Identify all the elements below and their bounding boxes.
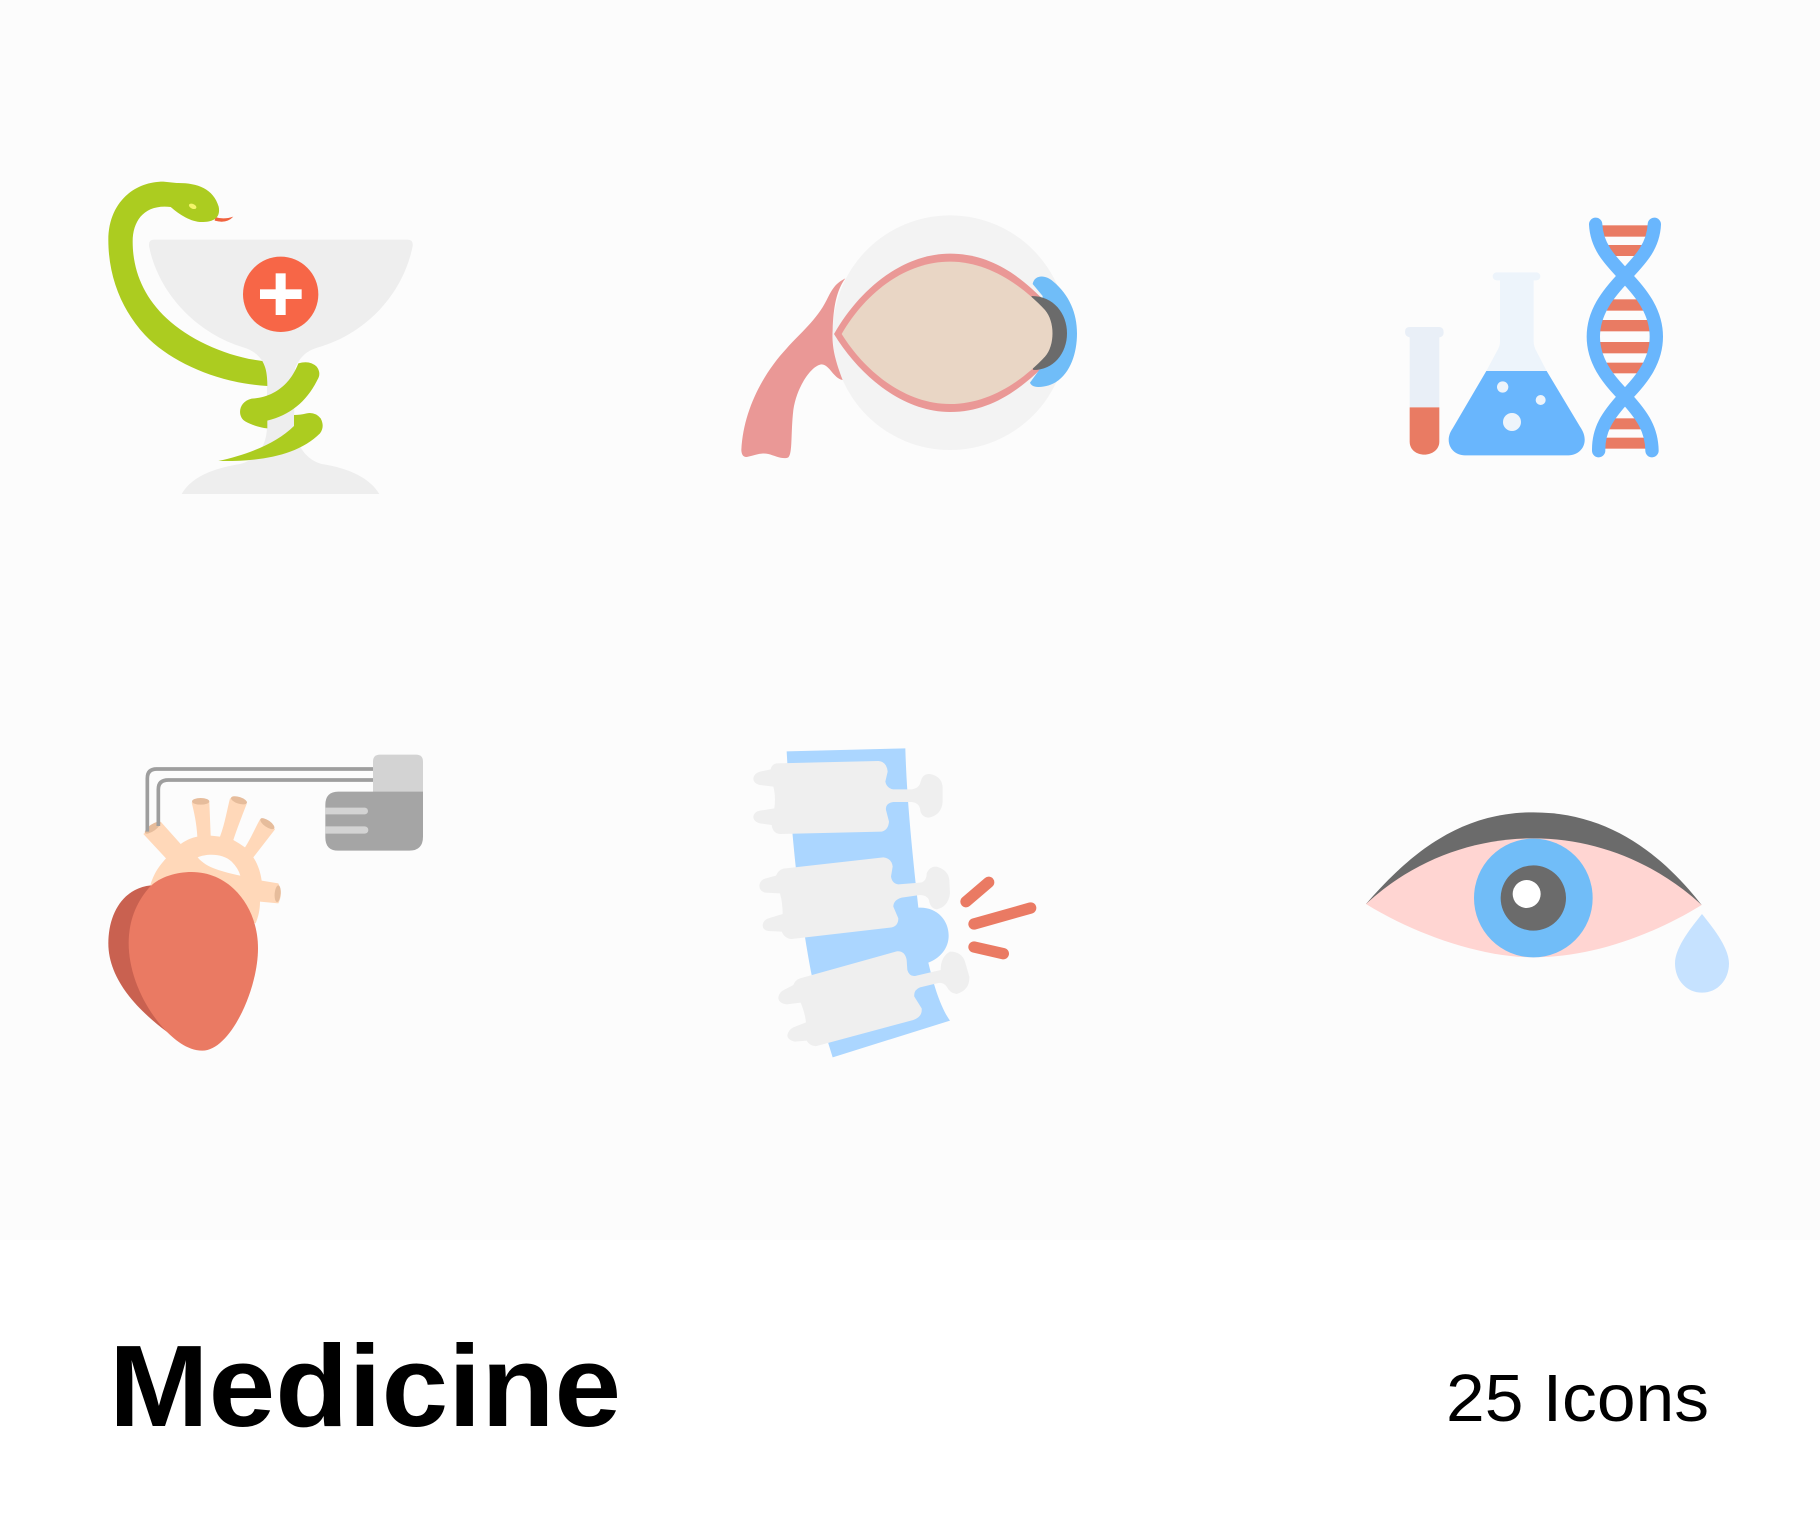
icon count: 25 Icons <box>1446 1361 1709 1436</box>
icon: watery eye <box>1366 812 1729 993</box>
icon: heart with pacemaker <box>108 755 423 1051</box>
icon: eye cross-section <box>741 215 1077 458</box>
icon: spine with herniated disc <box>753 748 1031 1057</box>
icon: bowl of hygieia with snake <box>108 182 413 494</box>
title: Medicine <box>109 1321 621 1451</box>
icon: test tube, flask and DNA <box>1405 224 1656 455</box>
